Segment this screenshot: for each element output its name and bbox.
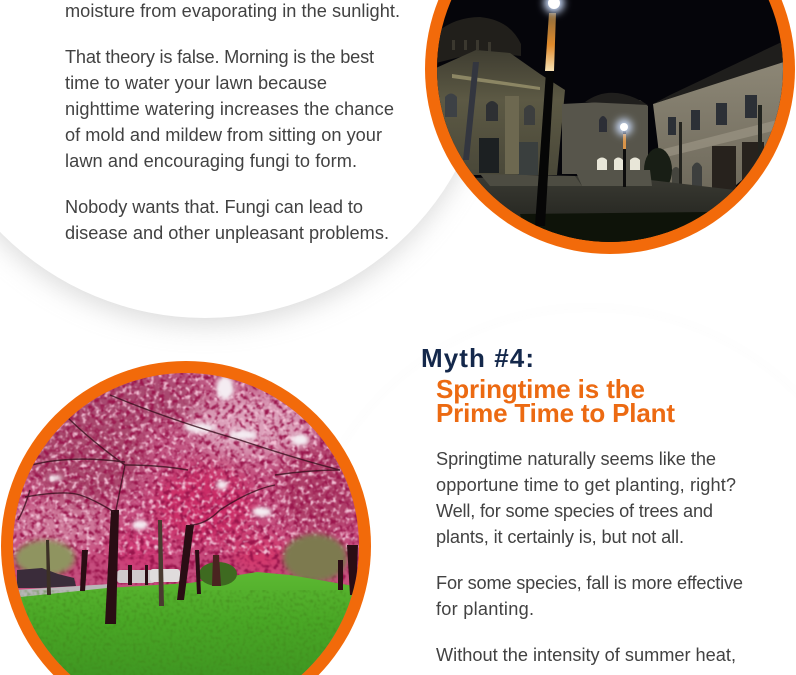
canopy tone patches bbox=[10, 374, 360, 573]
text block: watering myth explanation: Nobody wants that. Fungi can lead to bbox=[65, 197, 363, 217]
text block: watering myth explanation: disease and other unpleasant problems. bbox=[65, 223, 389, 243]
text block: planting seasons: for planting. bbox=[436, 599, 534, 619]
icon: night photo in orange ring bbox=[425, 0, 795, 254]
heading: Springtime is the Prime Time to Plant bbox=[436, 374, 675, 428]
left windows bbox=[445, 94, 457, 117]
text block: watering myth explanation: nighttime watering increases the chance bbox=[65, 99, 394, 119]
text block: watering myth explanation bbox=[65, 1, 400, 243]
heading: Springtime is the Prime Time to Plant: Springtime is the bbox=[436, 374, 645, 404]
left building facade bbox=[436, 50, 565, 175]
text block: planting seasons: For some species, fall is more effective bbox=[436, 573, 743, 593]
heading: Springtime is the Prime Time to Plant: Prime Time to Plant bbox=[436, 398, 675, 428]
panel: white circle with soft shadow bbox=[0, 0, 492, 325]
cars and road bbox=[18, 584, 108, 600]
trunks bbox=[46, 510, 358, 624]
sky gaps between blossoms bbox=[48, 376, 309, 530]
text block: watering myth explanation: moisture from evaporating in the sunlight. bbox=[65, 1, 400, 21]
text block: planting seasons: opportune time to get planting, right? bbox=[436, 475, 736, 495]
background foliage bbox=[15, 540, 75, 576]
lit windows bbox=[597, 158, 640, 170]
lamps bbox=[544, 0, 564, 13]
text block: watering myth explanation: time to water your lawn because bbox=[65, 73, 327, 93]
steps and lawn bbox=[476, 176, 734, 240]
text block: planting seasons bbox=[436, 449, 743, 665]
text block: watering myth explanation: of mold and mildew from sitting on your bbox=[65, 125, 382, 145]
text block: planting seasons: plants, it certainly is, but not all. bbox=[436, 527, 684, 547]
branches bbox=[18, 395, 340, 525]
left small pole bbox=[463, 62, 479, 160]
middle building bbox=[562, 100, 648, 174]
dome bbox=[436, 17, 521, 63]
text block: planting seasons: Well, for some species of trees and bbox=[436, 501, 713, 521]
heading: Myth #4: Myth #4: bbox=[421, 343, 534, 373]
lawn bbox=[10, 572, 360, 675]
text block: planting seasons: Springtime naturally seems like the bbox=[436, 449, 716, 469]
text block: watering myth explanation: lawn and encouraging fungi to form. bbox=[65, 151, 357, 171]
trees bbox=[644, 148, 672, 182]
background glow: faint circle behind myth 4 bbox=[298, 308, 796, 675]
right building bbox=[653, 60, 790, 190]
text block: planting seasons: Without the intensity of summer heat, bbox=[436, 645, 736, 665]
bush bbox=[199, 562, 237, 586]
poles bbox=[535, 72, 554, 226]
icon: cherry blossom photo in orange ring bbox=[0, 360, 372, 675]
text block: watering myth explanation: That theory is false. Morning is the best bbox=[65, 47, 374, 67]
blossom texture bbox=[13, 373, 359, 585]
